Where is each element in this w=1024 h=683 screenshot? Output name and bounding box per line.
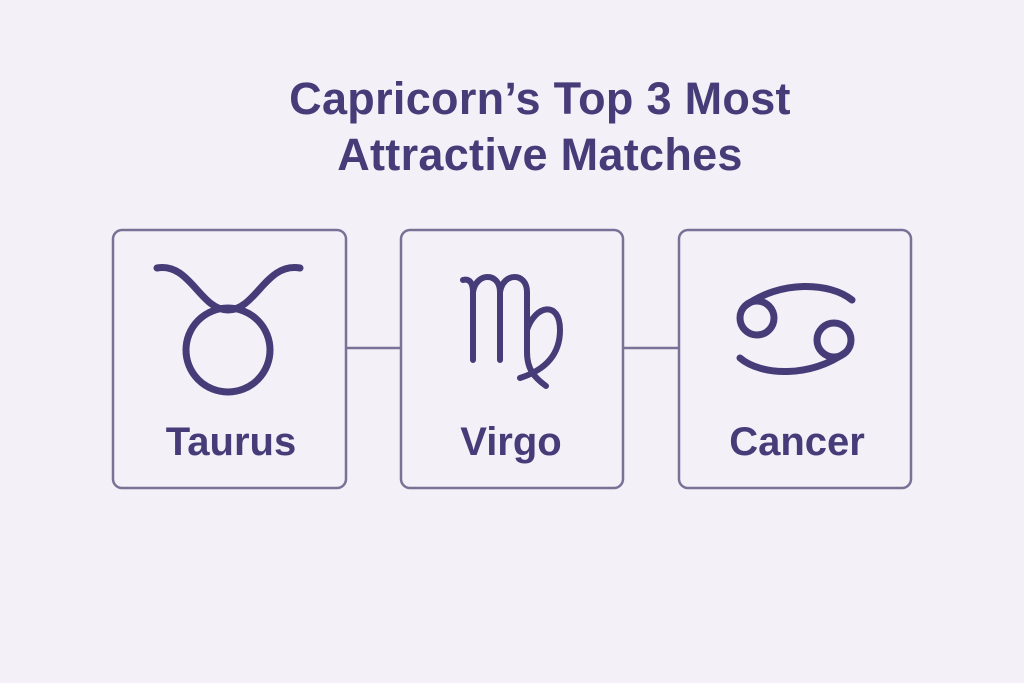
connector: taurus to virgo xyxy=(346,347,401,349)
icon: taurus xyxy=(157,267,300,392)
icon: virgo xyxy=(463,277,560,386)
panel: taurus xyxy=(113,230,346,488)
title xyxy=(289,73,791,180)
label: virgo: Virgo xyxy=(460,420,562,464)
panel: virgo xyxy=(401,230,623,488)
panel: cancer xyxy=(679,230,911,488)
icon: cancer xyxy=(740,286,852,372)
connector: virgo to cancer xyxy=(623,347,679,349)
label: cancer: Cancer xyxy=(729,420,865,464)
title: Capricorn’s Top 3 Most xyxy=(289,73,791,124)
title: Attractive Matches xyxy=(337,129,743,180)
label: taurus: Taurus xyxy=(166,420,296,464)
